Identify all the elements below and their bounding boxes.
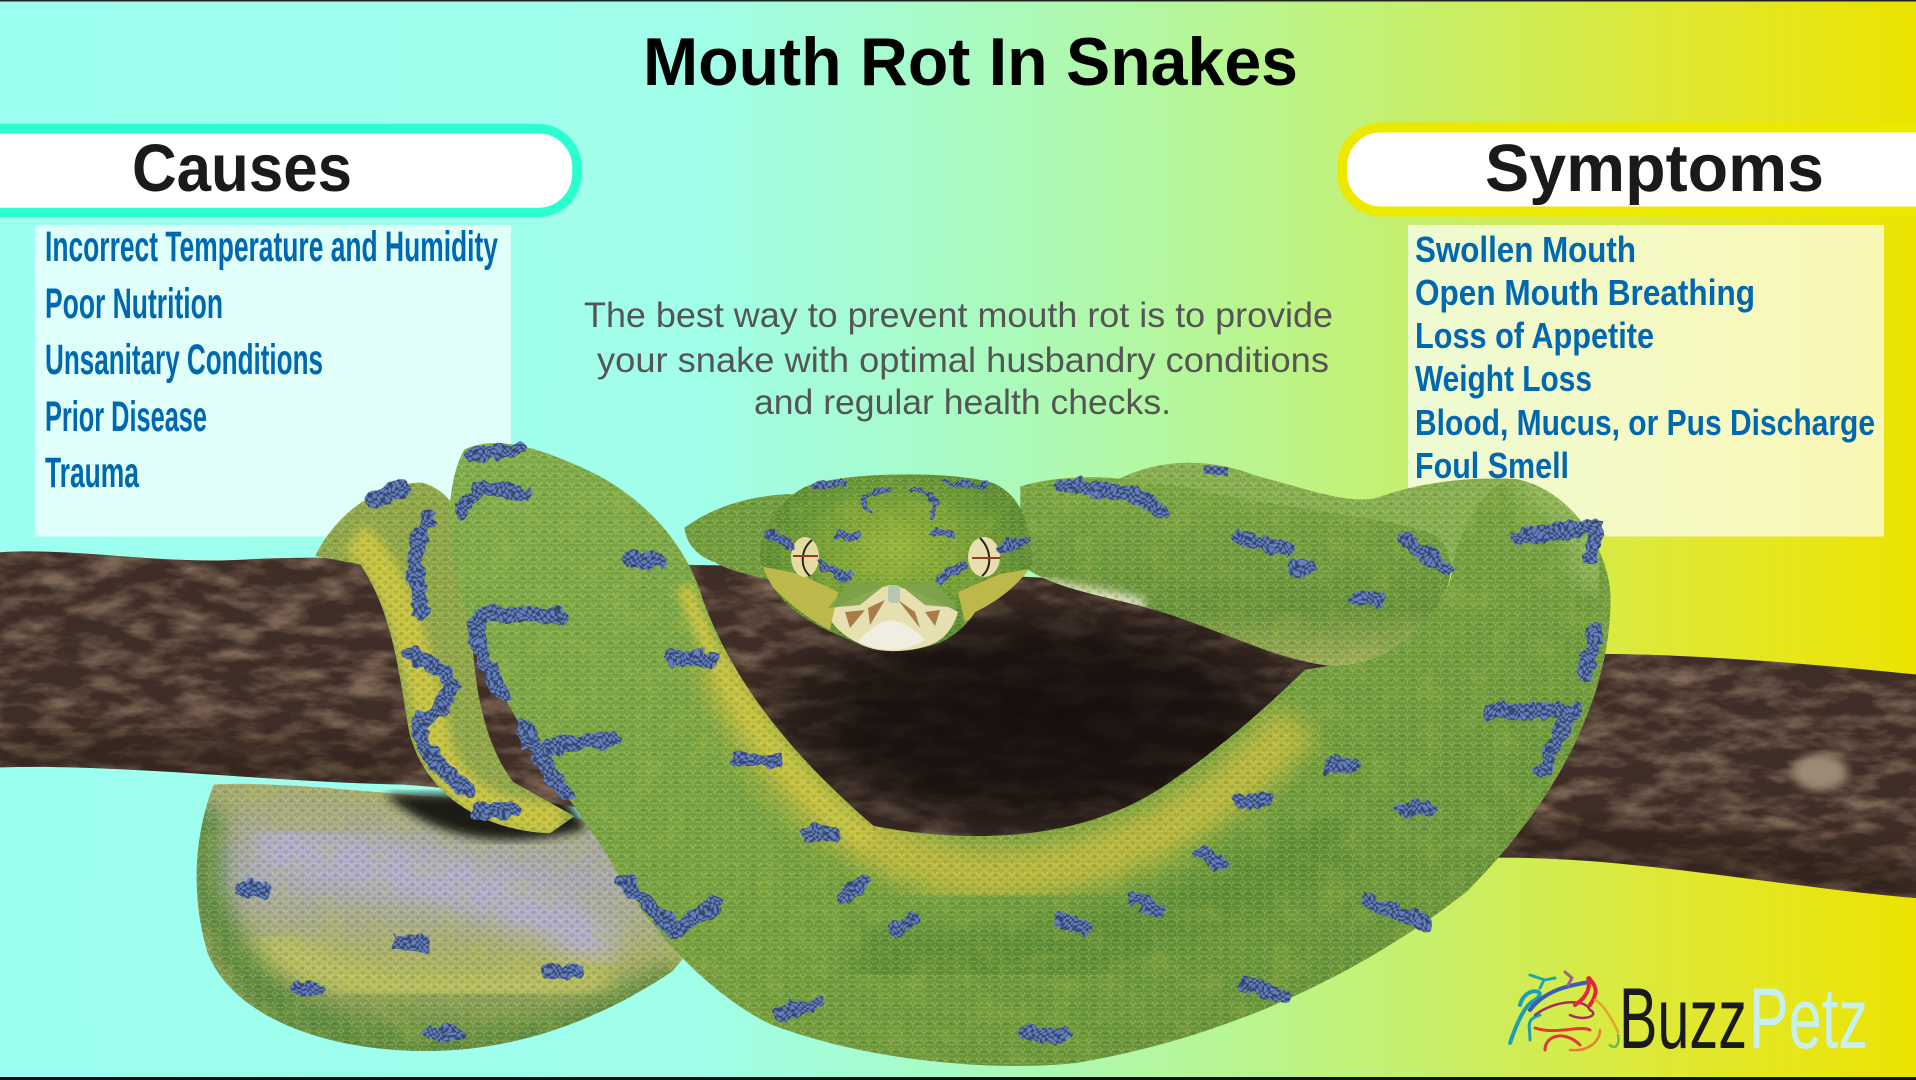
symptoms list bbox=[1408, 225, 1884, 536]
causes heading pill bbox=[0, 128, 577, 212]
small left coil bbox=[315, 483, 574, 833]
rear body coil bbox=[1100, 463, 1515, 574]
symptoms heading pill: Symptoms bbox=[1485, 131, 1824, 206]
snout bbox=[826, 585, 958, 651]
wordmark: Buzz bbox=[1619, 971, 1747, 1067]
causes list: Incorrect Temperature and Humidity bbox=[45, 223, 498, 271]
prevention text: and regular health checks. bbox=[754, 383, 1171, 422]
dark gap under coil bbox=[385, 794, 587, 840]
main body coil bbox=[450, 443, 1611, 1066]
snake and branch illustration bbox=[0, 443, 1916, 1066]
eye left bbox=[791, 537, 819, 577]
panel: symptoms bbox=[1342, 128, 1916, 536]
logo: BuzzPetz: Petz bbox=[1749, 971, 1868, 1067]
symptoms list: Weight Loss bbox=[1415, 358, 1592, 399]
panel: causes bbox=[0, 128, 577, 536]
upper body behind head bbox=[1008, 477, 1450, 666]
symptoms heading pill bbox=[1342, 128, 1916, 212]
head markings bbox=[768, 483, 1028, 578]
symptoms list: Swollen Mouth bbox=[1415, 229, 1636, 270]
eye right bbox=[968, 537, 1000, 577]
causes list: Trauma bbox=[45, 449, 140, 497]
symptoms list: Open Mouth Breathing bbox=[1415, 272, 1755, 313]
causes list: Poor Nutrition bbox=[45, 280, 223, 328]
snake neck bbox=[684, 494, 813, 594]
causes list: Unsanitary Conditions bbox=[45, 336, 323, 384]
lower left coil bbox=[197, 784, 709, 1061]
logo: BuzzPetz bbox=[1510, 971, 1868, 1067]
causes list: Prior Disease bbox=[45, 393, 207, 441]
symptoms list: Foul Smell bbox=[1415, 445, 1569, 486]
title: Mouth Rot In Snakes bbox=[643, 24, 1298, 100]
prevention text: your snake with optimal husbandry conditions bbox=[597, 341, 1329, 380]
causes heading pill: Causes bbox=[132, 131, 352, 206]
tree branch bbox=[0, 551, 1916, 898]
snake head bbox=[755, 474, 1035, 651]
icon: multicolour pet outlines bbox=[1510, 972, 1618, 1050]
symptoms list: Loss of Appetite bbox=[1415, 315, 1654, 356]
prevention text bbox=[584, 296, 1333, 422]
causes list bbox=[35, 223, 511, 536]
prevention text: The best way to prevent mouth rot is to provide bbox=[584, 296, 1333, 335]
